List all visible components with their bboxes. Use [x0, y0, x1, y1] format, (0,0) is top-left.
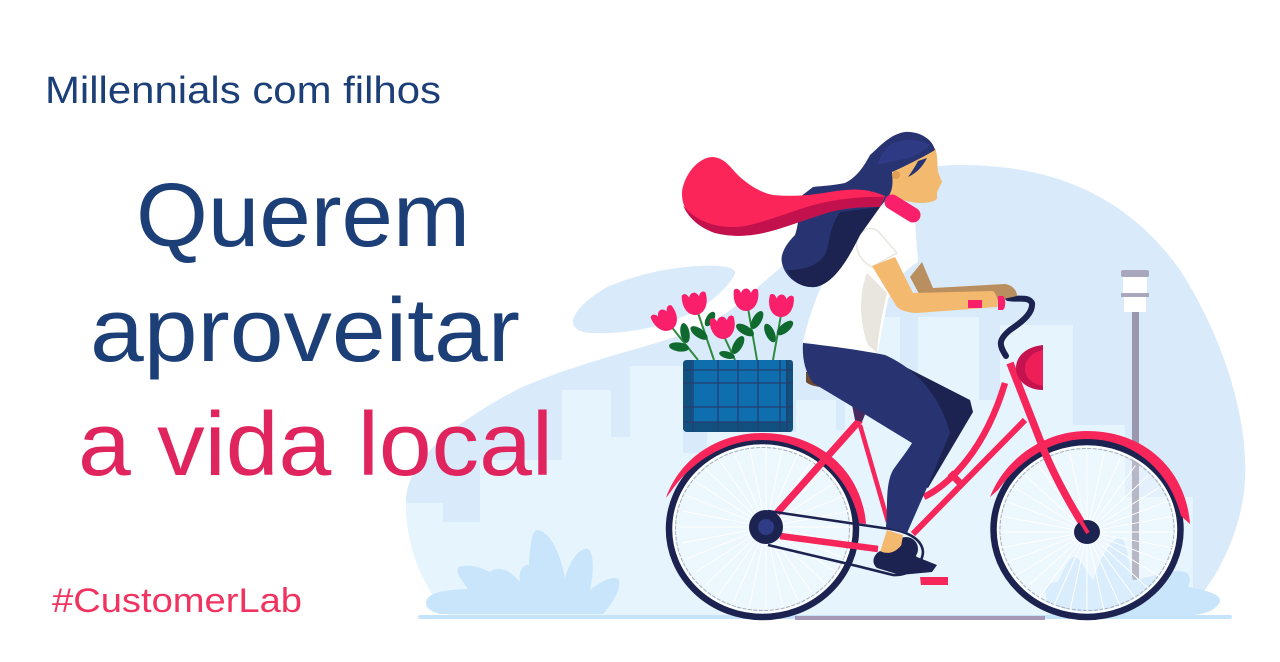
hashtag: #CustomerLab — [52, 582, 302, 620]
stems — [670, 308, 781, 360]
bicycle frame — [777, 363, 1087, 549]
tulips — [650, 288, 794, 341]
headline line 3: a vida local — [78, 395, 553, 495]
ground line — [418, 615, 1232, 620]
torso — [803, 205, 918, 355]
basket — [683, 360, 793, 432]
sleeve rim — [857, 228, 897, 267]
bush right — [1045, 538, 1220, 615]
city skyline — [400, 317, 1193, 620]
bush left — [426, 530, 619, 614]
hair shadow — [787, 207, 880, 287]
seat — [806, 372, 866, 422]
chain and sprocket — [749, 510, 923, 575]
scarf collar — [892, 202, 913, 215]
flowers — [650, 288, 796, 360]
scarf — [682, 157, 885, 236]
rider — [682, 132, 1017, 575]
front arm — [872, 257, 998, 313]
headline line 2: aproveitar — [90, 281, 520, 381]
leaves — [668, 309, 796, 360]
hair fringe — [908, 158, 927, 177]
rear wheel — [669, 441, 856, 617]
front lamp — [1016, 345, 1043, 390]
shirt shade — [861, 273, 887, 353]
hair highlight — [877, 140, 930, 165]
handlebar — [1001, 298, 1032, 356]
scarf underside — [683, 197, 884, 236]
fenders — [666, 431, 1190, 524]
headline line 1: Querem — [136, 166, 470, 266]
shoe — [873, 543, 937, 575]
blue blob — [406, 165, 1245, 617]
headline — [78, 166, 553, 495]
lamp post — [1121, 270, 1149, 588]
grip and hand — [968, 296, 1005, 310]
back leg — [880, 354, 973, 488]
subtitle: Millennials com filhos — [45, 70, 441, 112]
back arm — [910, 262, 1017, 305]
pedal — [920, 577, 948, 585]
front leg — [803, 343, 950, 533]
neck and head — [888, 148, 942, 203]
illustration background: city blob — [400, 165, 1245, 620]
ankle — [880, 530, 903, 555]
cloud pill — [573, 266, 735, 333]
ear — [892, 171, 900, 179]
front hub — [1072, 507, 1100, 544]
hair — [782, 132, 935, 287]
front wheel — [994, 442, 1180, 617]
